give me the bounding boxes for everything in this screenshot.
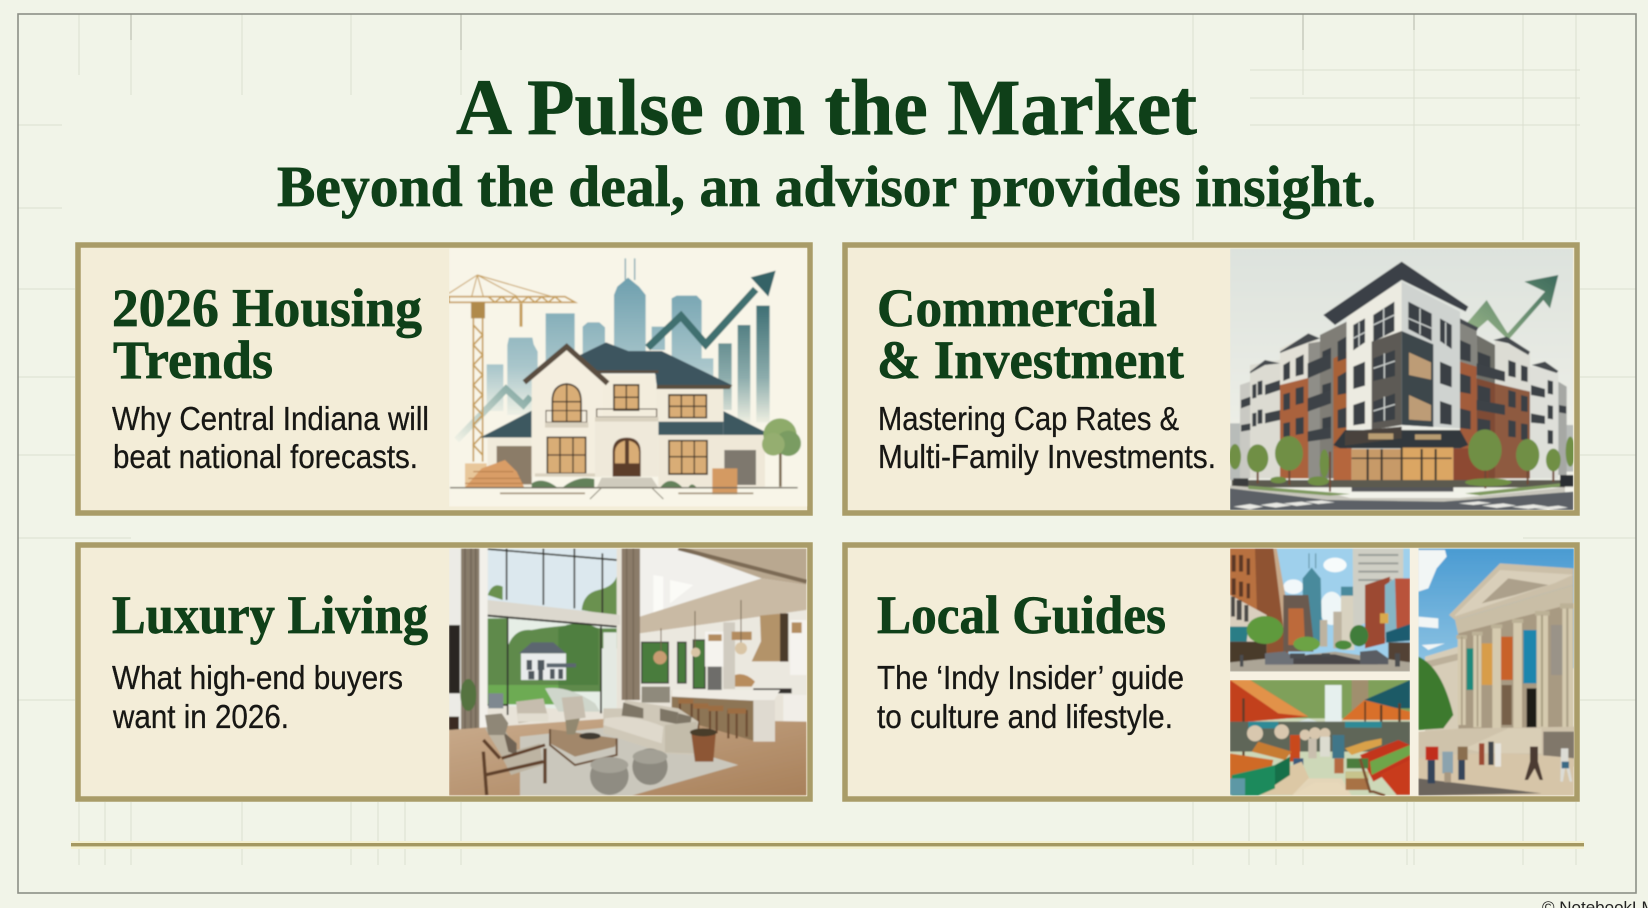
heading: 2026 housing trends: Trends <box>113 330 273 390</box>
body text: indy insider: The ‘Indy Insider’ guide <box>877 659 1184 696</box>
body text: indy insider: to culture and lifestyle. <box>877 698 1173 735</box>
heading: 2026 housing trends: 2026 Housing <box>112 278 422 338</box>
illustration: house, crane, skyline and rising arrow <box>449 248 807 507</box>
illustration: multi-family apartment building with arrow <box>1229 248 1575 510</box>
body text: cap rates: Mastering Cap Rates & <box>878 400 1179 437</box>
illustration: luxury open-plan living room <box>449 548 807 796</box>
body text: indy insider <box>877 659 1184 735</box>
image: farmers market <box>1230 680 1410 796</box>
panel: 2026 housing trends <box>78 245 810 513</box>
heading: commercial and investment: & Investment <box>877 330 1184 390</box>
body text: central indiana <box>112 400 429 475</box>
panel: commercial and investment <box>845 245 1577 513</box>
body text: high-end buyers: want in 2026. <box>112 698 289 735</box>
body text: central indiana: Why Central Indiana will <box>112 400 429 437</box>
heading: luxury living: Luxury Living <box>112 585 428 645</box>
image: downtown street <box>1230 548 1410 672</box>
bottom rule <box>71 841 1584 849</box>
heading: 2026 housing trends <box>112 278 422 390</box>
heading: commercial and investment <box>877 278 1184 390</box>
image: museum with columns <box>1418 548 1575 796</box>
title: A Pulse on the Market <box>456 65 1197 152</box>
heading: local guides: Local Guides <box>877 585 1166 645</box>
body text: cap rates <box>878 400 1216 475</box>
panel: local guides <box>845 545 1577 799</box>
body text: high-end buyers: What high-end buyers <box>112 659 403 696</box>
illustration: photo collage of city, market and museum <box>1230 548 1575 796</box>
subtitle: Beyond the deal, an advisor provides insight. <box>277 154 1376 219</box>
body text: central indiana: beat national forecasts. <box>113 438 418 475</box>
body text: high-end buyers <box>112 659 403 735</box>
panel: luxury living <box>78 545 810 799</box>
heading: commercial and investment: Commercial <box>877 278 1157 338</box>
body text: cap rates: Multi-Family Investments. <box>878 438 1216 475</box>
